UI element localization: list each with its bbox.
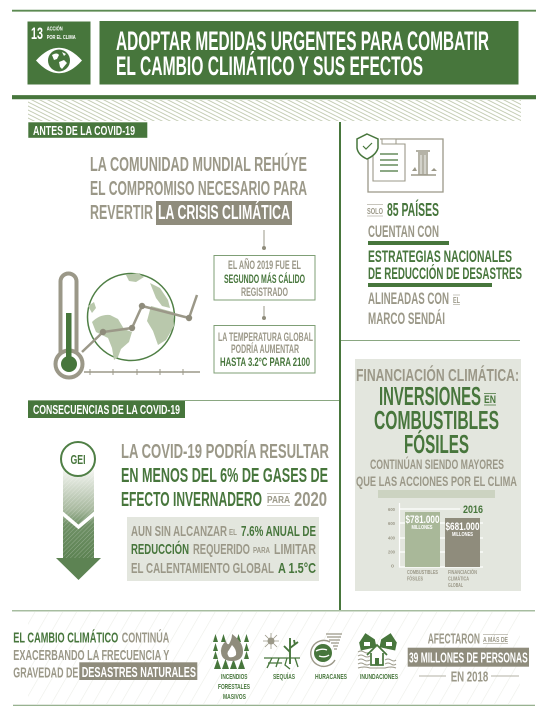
callout: 39 millones de personas: AFECTARON	[428, 630, 480, 647]
heading: la comunidad mundial: LA COMUNIDAD MUNDIAL REHÚYE	[90, 152, 307, 176]
bar chart: MILLONES	[452, 532, 474, 538]
heading: la COVID-19 podría resultar: LA COVID-19 PODRÍA RESULTAR	[121, 440, 329, 463]
icon: GEI down arrow	[56, 442, 101, 580]
text block: desastres naturales: GRAVEDAD DE	[13, 664, 78, 681]
section label: antes de la COVID-19: ANTES DE LA COVID-19	[33, 123, 135, 138]
bar chart: GLOBAL	[448, 583, 463, 589]
illustration: thermometer, globe and temperature line	[56, 273, 200, 378]
heading: la comunidad mundial	[90, 152, 307, 225]
bar chart: 600	[388, 521, 395, 526]
icon labels: MASIVOS	[223, 694, 246, 701]
text block: desastres naturales: CONTINÚA	[122, 629, 169, 647]
text block: desastres naturales	[13, 629, 197, 681]
callout: 39 millones de personas	[408, 630, 529, 686]
icon: strategy document with shield	[357, 134, 443, 192]
bar chart: 400	[388, 536, 395, 540]
icon labels: INUNDACIONES	[360, 674, 398, 681]
text block: 85 países: CUENTAN CON	[368, 222, 439, 241]
panel: financiación climática	[355, 359, 521, 591]
text block: 85 países: EL	[453, 296, 460, 305]
icon: SDG 13 climate action: 13	[31, 24, 43, 43]
icon labels: SEQUÍAS	[273, 672, 295, 681]
icon: SDG 13 climate action	[28, 22, 90, 84]
callout: 39 millones de personas: EN 2018	[451, 669, 488, 686]
heading: financiación climática	[356, 364, 519, 489]
panel: reducción requerida: REDUCCIÓN	[131, 540, 189, 558]
heading: la COVID-19 podría resultar: PARA	[267, 495, 290, 506]
icon: SDG 13 climate action: ACCIÓN	[47, 25, 63, 33]
bar chart: COMBUSTIBLES	[407, 570, 439, 576]
heading: la COVID-19 podría resultar: 2020	[294, 489, 327, 511]
bar chart: 0	[391, 564, 395, 568]
text block: 85 países: 85 PAÍSES	[387, 199, 439, 220]
text block: 85 países: ALINEADAS CON	[368, 289, 449, 308]
callout: temperatura: HASTA 3.2°C PARA 2100	[220, 357, 310, 369]
panel: reducción requerida: REQUERIDO	[193, 541, 250, 558]
bar chart: 600	[388, 507, 395, 512]
heading: la COVID-19 podría resultar	[121, 440, 329, 511]
text block: desastres naturales: EXACERBANDO LA FRECUENCIA Y	[13, 647, 169, 664]
section label: consecuencias de la COVID-19: CONSECUENCIAS DE LA COVID-19	[33, 402, 180, 417]
icon labels	[218, 672, 398, 701]
connector arrow	[262, 230, 266, 250]
panel: reducción requerida: EL CALENTAMIENTO GLOBAL	[131, 560, 274, 577]
section label: consecuencias de la COVID-19	[28, 401, 185, 418]
callout: temperatura	[214, 326, 315, 373]
panel: reducción requerida: LIMITAR	[274, 541, 316, 558]
heading: financiación climática: EN	[484, 394, 496, 406]
panel: reducción requerida	[127, 517, 319, 581]
panel: reducción requerida: EL	[229, 528, 237, 537]
bar chart: FÓSILES	[407, 574, 423, 582]
panel: reducción requerida: PARA	[253, 546, 270, 555]
heading: la COVID-19 podría resultar: EN MENOS DEL 6% DE GASES DE	[121, 465, 328, 487]
bar chart: $781.000	[406, 514, 440, 526]
callout: 2019: REGISTRADO	[241, 287, 288, 299]
text block: 85 países: SOLO	[367, 207, 383, 216]
bar chart: $681.000	[446, 521, 480, 533]
icon labels: INCENDIOS	[221, 674, 248, 681]
bar chart: 2016	[463, 504, 483, 516]
text block: desastres naturales: DESASTRES NATURALES	[82, 664, 196, 681]
callout: temperatura: PODRÍA AUMENTAR	[231, 343, 299, 356]
callout: temperatura: LA TEMPERATURA GLOBAL	[218, 332, 313, 344]
heading: financiación climática: FÓSILES	[404, 429, 469, 459]
icon: hurricanes	[311, 634, 342, 666]
connector arrow	[262, 306, 266, 320]
bar chart: 200	[388, 550, 395, 554]
bar chart: CLIMÁTICA	[448, 576, 469, 582]
callout: 2019	[214, 256, 315, 300]
icon: floods	[358, 632, 398, 668]
bar chart	[388, 503, 483, 589]
text block: desastres naturales: EL CAMBIO CLIMÁTICO	[13, 630, 118, 647]
icon labels: HURACANES	[315, 674, 347, 681]
callout: 2019: SEGUNDO MÁS CÁLIDO	[224, 273, 305, 286]
icon: wildfires	[213, 634, 249, 669]
text block: 85 países	[367, 199, 522, 328]
text block: 85 países: MARCO SENDÁI	[368, 309, 445, 328]
heading: financiación climática: INVERSIONES	[379, 383, 481, 411]
panel: reducción requerida: AUN SIN ALCANZAR	[131, 523, 227, 540]
heading: la comunidad mundial: EL COMPROMISO NECESARIO PARA	[90, 177, 307, 200]
bar chart: FINANCIACIÓN	[448, 568, 477, 576]
icon labels: FORESTALES	[218, 684, 250, 691]
icon: droughts	[263, 633, 300, 669]
heading: la comunidad mundial: REVERTIR	[90, 201, 153, 224]
heading: la comunidad mundial: LA CRISIS CLIMÁTICA	[158, 201, 290, 224]
icon: SDG 13 climate action: POR EL CLIMA	[47, 35, 76, 41]
title	[100, 21, 518, 84]
heading: la COVID-19 podría resultar: EFECTO INVERNADERO	[121, 489, 262, 511]
panel: reducción requerida: 7.6% ANUAL DE	[241, 523, 316, 540]
callout: 39 millones de personas: A MÁS DE	[483, 635, 508, 644]
icon: GEI down arrow: GEI	[70, 452, 86, 467]
callout: 2019: EL AÑO 2019 FUE EL	[228, 259, 301, 272]
panel: reducción requerida: A 1.5°C	[278, 560, 316, 577]
bar chart: MILLONES	[412, 525, 433, 531]
